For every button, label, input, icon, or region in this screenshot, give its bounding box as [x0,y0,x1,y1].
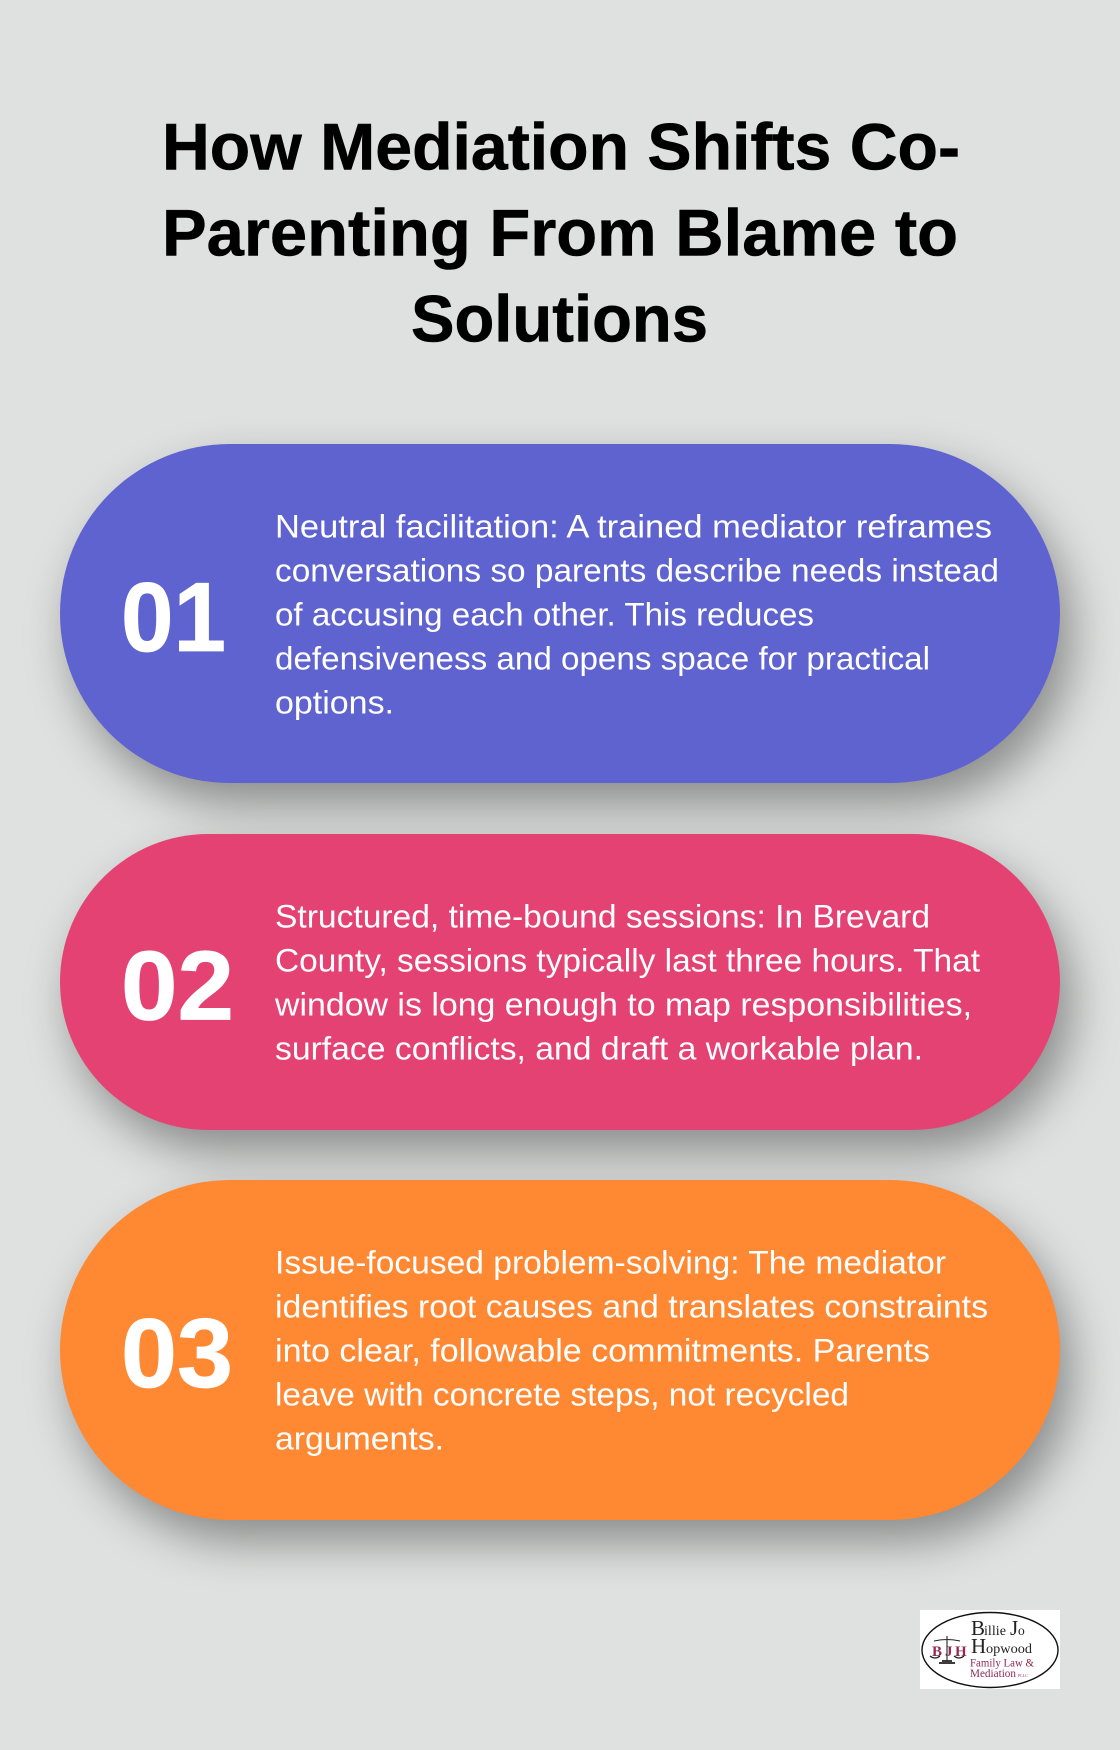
text: neutral facilitation: of accusing each other. This reduces [275,596,814,632]
logo name: opwood [986,1642,1032,1657]
text: neutral facilitation: options. [275,684,394,720]
logo name: o [1018,1623,1025,1638]
panel: step 02 structured sessions [60,834,1060,1130]
title: Parenting From Blame to [162,196,958,270]
logo subtitle [970,1656,1035,1680]
text: neutral facilitation [275,508,999,720]
logo name [971,1616,1032,1658]
text: issue-focused problem-solving: Issue-focused problem-solving: The mediator [275,1244,946,1280]
logo monogram: H [955,1644,967,1660]
text: issue-focused problem-solving: into clear, followable commitments. Parents [275,1332,930,1368]
logo subtitle: Mediation [970,1666,1016,1680]
text: neutral facilitation: defensiveness and opens space for practical [275,640,930,676]
text: structured sessions: surface conflicts, and draft a workable plan. [275,1030,923,1066]
logo: Billie Jo Hopwood Family Law & Mediation [920,1610,1060,1689]
text: structured sessions: window is long enough to map responsibilities, [274,986,972,1022]
logo name: illie [984,1623,1006,1638]
title: Solutions [411,282,708,356]
title: How Mediation Shifts Co- [162,110,960,184]
logo subtitle: PLLC [1018,1673,1028,1678]
text: structured sessions: Structured, time-bound sessions: In Brevard [275,898,930,934]
icon: scales of justice [930,1636,964,1663]
logo name: J [1010,1616,1018,1640]
text: issue-focused problem-solving: identifies root causes and translates constraints [275,1288,988,1324]
text: issue-focused problem-solving: leave with concrete steps, not recycled [275,1376,849,1412]
text: structured sessions [274,898,980,1066]
logo name: B [971,1616,985,1640]
text: issue-focused problem-solving [275,1244,988,1456]
text: neutral facilitation: Neutral facilitation: A trained mediator reframes [275,508,992,544]
text: issue-focused problem-solving: arguments. [275,1420,444,1456]
number 02: 02 [121,930,234,1040]
panel: step 01 neutral facilitation [60,444,1060,783]
logo subtitle: Family Law & [970,1656,1035,1670]
logo name: H [971,1634,986,1658]
title [162,110,960,356]
text: neutral facilitation: conversations so parents describe needs instead [275,552,999,588]
number 03: 03 [121,1298,233,1408]
logo monogram [932,1644,967,1660]
logo monogram: J [945,1644,953,1660]
number 01: 01 [121,562,226,672]
text: structured sessions: County, sessions typically last three hours. That [275,942,980,978]
logo monogram: B [932,1644,942,1660]
panel: step 03 issue-focused problem-solving [60,1180,1060,1520]
